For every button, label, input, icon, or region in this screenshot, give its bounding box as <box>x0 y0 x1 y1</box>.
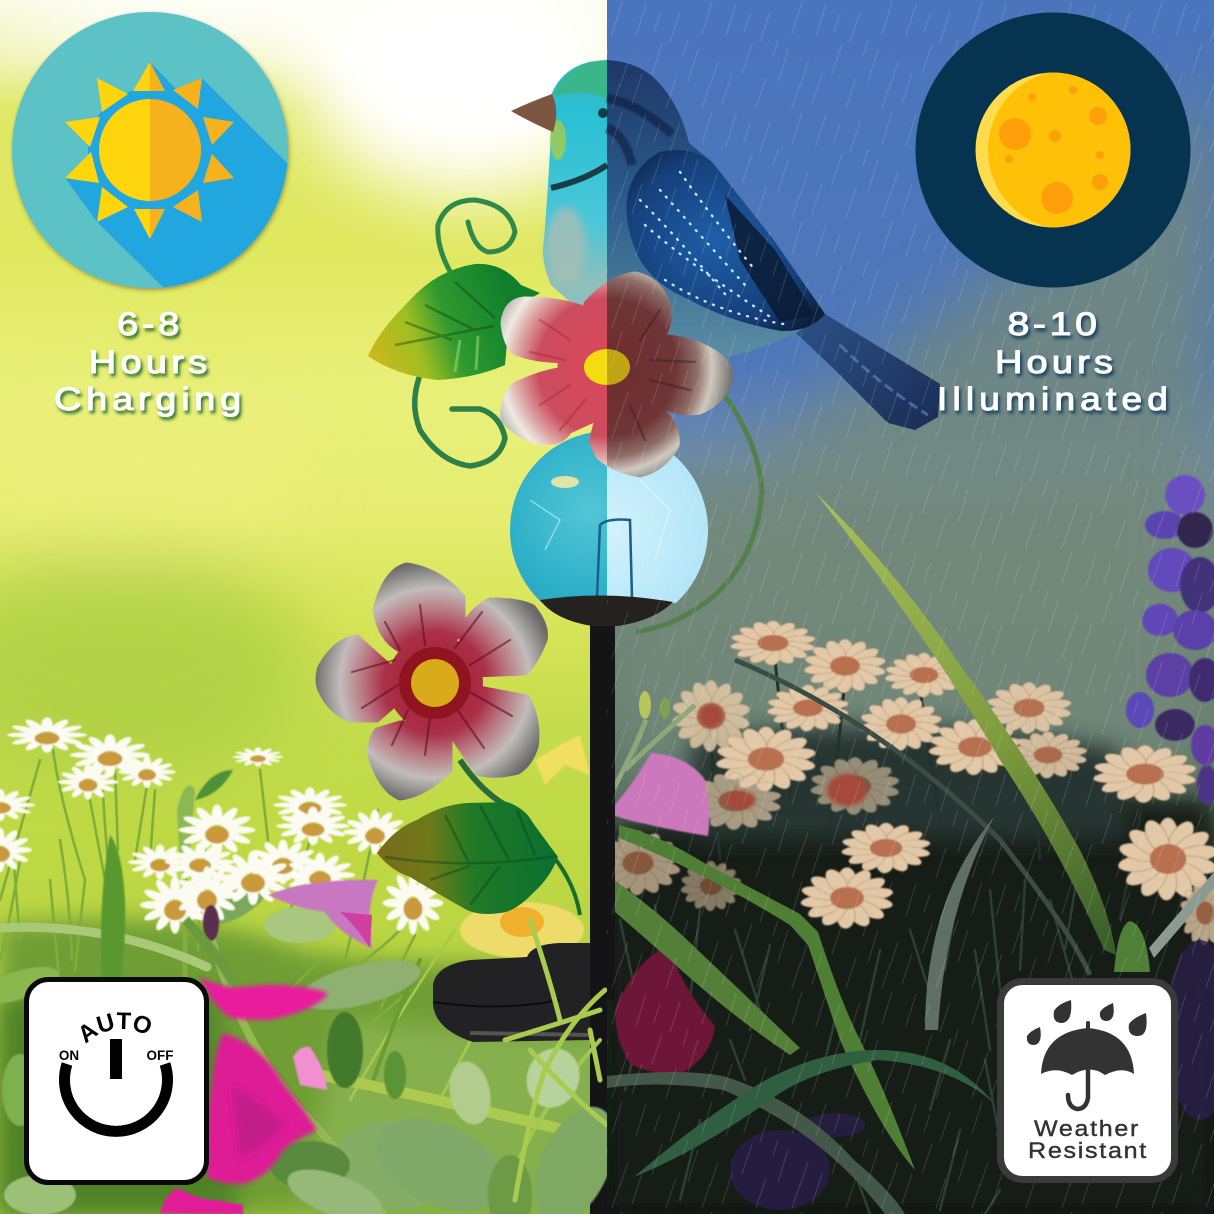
pink petunias <box>160 880 378 1214</box>
charging duration text <box>54 306 246 417</box>
stake pole <box>590 610 615 1000</box>
sun ring <box>88 88 212 212</box>
power bar <box>110 1039 122 1079</box>
panel: sunny day side <box>0 0 640 1214</box>
weather label: Weather <box>1034 1116 1140 1141</box>
resistant label: Resistant <box>1028 1138 1148 1163</box>
lower leaf <box>377 802 580 915</box>
solar stake figure <box>318 60 940 1200</box>
bird tail <box>796 314 940 430</box>
foreground stalk detail <box>185 920 235 985</box>
bird beak <box>511 94 556 132</box>
lower flower <box>318 565 546 805</box>
dark red flower, rainy <box>615 945 715 1074</box>
red daisy patches, rainy <box>699 704 867 809</box>
dark undergrowth <box>607 790 1214 1214</box>
mid-tone foliage band <box>690 727 1130 840</box>
tail highlight <box>840 345 928 415</box>
illumination duration text <box>937 306 1173 417</box>
moon crescent <box>976 72 1130 228</box>
badge: weather resistant <box>1000 982 1174 1180</box>
icon: rain drops <box>1027 1000 1147 1045</box>
right support arc <box>636 392 762 632</box>
bird chest band <box>551 165 607 188</box>
illumination hours unit: Hours <box>995 344 1117 380</box>
moon body <box>988 72 1130 228</box>
flower buds, rainy <box>615 691 696 790</box>
bird head colour <box>553 60 607 100</box>
bird eye <box>598 108 608 118</box>
on label: ON <box>59 1048 79 1063</box>
daisies, rainy <box>594 621 1214 946</box>
charging hours unit: Hours <box>88 344 212 380</box>
auto curved label: AUTO <box>80 1012 151 1044</box>
grass blades, rainy <box>607 492 1214 1214</box>
bird neck tint <box>550 120 566 160</box>
rain overlay <box>607 0 1214 1214</box>
sun rays right <box>150 62 234 239</box>
charging label: Charging <box>54 381 246 417</box>
purple shadows, rainy <box>730 940 1214 1210</box>
solar panel box <box>433 943 590 1042</box>
sunny sky background <box>0 0 607 1214</box>
moon craters <box>999 86 1108 214</box>
pole behind leaves <box>590 1000 607 1214</box>
illumination hours number: 8-10 <box>1008 306 1100 342</box>
garden mass, sunny <box>0 919 607 1214</box>
green leaves, sunny <box>0 770 631 1214</box>
arching dark stem, rainy <box>735 660 1090 975</box>
purple flower spikes <box>1126 475 1214 805</box>
off label: OFF <box>146 1048 174 1063</box>
icon: moon in navy circle <box>916 12 1190 288</box>
sun disc right half <box>150 99 201 201</box>
green curl, upper <box>438 200 515 280</box>
yellow daisies, sunny <box>460 735 590 958</box>
storm haze <box>607 80 1214 800</box>
bird <box>511 60 940 430</box>
green curl, lower <box>415 378 505 466</box>
icon: umbrella <box>1041 1021 1134 1109</box>
solar cup <box>540 595 673 626</box>
stems, rainy <box>710 660 1145 920</box>
glass globe <box>510 432 708 603</box>
lower flower centre <box>399 647 471 719</box>
illuminated label: Illuminated <box>937 381 1173 417</box>
badge: auto on off <box>24 977 209 1185</box>
undergrowth foliage strokes <box>620 860 1080 1214</box>
upper leaf <box>368 264 540 380</box>
rainy sky background <box>607 0 1214 1214</box>
pink flower, rainy <box>607 753 709 836</box>
sun glow <box>0 0 640 770</box>
icon: sun in teal circle <box>12 12 300 300</box>
panel: rainy night side <box>594 0 1214 1214</box>
sun long shadow <box>65 62 288 288</box>
bird wing <box>626 150 825 331</box>
foreground grass, sunny <box>505 920 607 1200</box>
power arc <box>65 1064 167 1131</box>
flower stems, sunny <box>0 750 607 1214</box>
flower centre <box>584 349 607 385</box>
charging hours number: 6-8 <box>117 306 183 342</box>
head stripes, rain side <box>607 98 672 165</box>
sun disc left half <box>99 99 150 201</box>
daisies, sunny <box>0 717 443 935</box>
sun rays left <box>65 62 150 239</box>
bird belly <box>546 207 586 283</box>
flower on globe <box>502 273 731 476</box>
